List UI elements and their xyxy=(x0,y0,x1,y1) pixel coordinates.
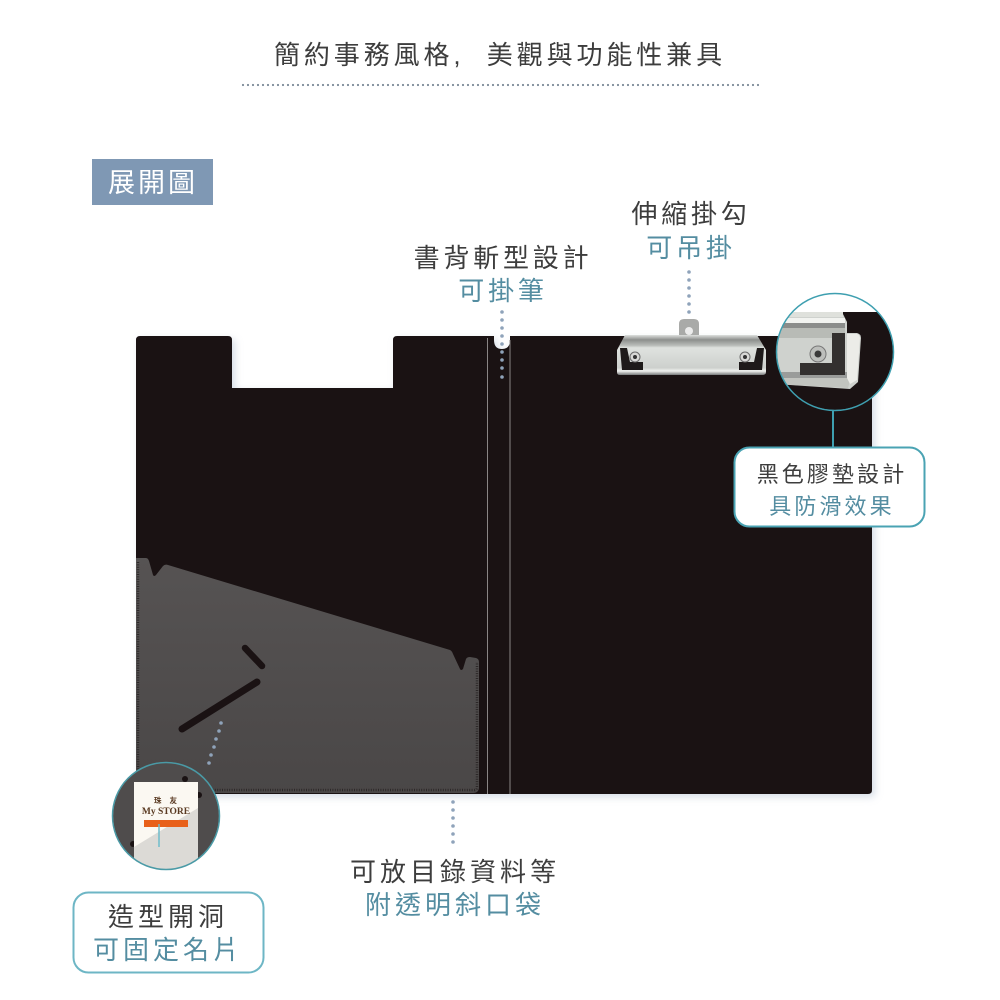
connector xyxy=(832,410,834,447)
black pad xyxy=(800,333,845,375)
label: 伸縮掛勾 xyxy=(631,199,751,263)
label: 可放目錄資料等: 附透明斜口袋 xyxy=(365,890,545,920)
clip plate xyxy=(775,312,861,389)
label: 伸縮掛勾: 可吊掛 xyxy=(646,233,736,263)
callout box: 黑色膠墊設計: 具防滑效果 xyxy=(769,494,895,519)
callout circle: business card: My STORE xyxy=(142,807,190,817)
callout box: 黑色膠墊設計: 黑色膠墊設計 xyxy=(757,462,907,487)
label: 可放目錄資料等 xyxy=(350,857,560,920)
callout circle: rubber pad detail xyxy=(775,290,897,447)
label: 書背斬型設計: 可掛筆 xyxy=(458,276,548,306)
hook xyxy=(679,319,699,335)
dotted leader: spine notch xyxy=(500,310,504,379)
label: 伸縮掛勾: 伸縮掛勾 xyxy=(631,199,751,229)
business card slots xyxy=(182,648,262,729)
transparent pocket xyxy=(136,558,479,793)
clipboard board xyxy=(136,336,875,797)
callout circle: business card xyxy=(110,760,222,872)
tag: 展開圖 xyxy=(92,159,213,205)
callout box: 造型開洞 xyxy=(74,892,264,972)
dotted leader: hook xyxy=(687,270,691,314)
label: 可放目錄資料等: 可放目錄資料等 xyxy=(350,857,560,887)
clip with hook xyxy=(617,319,766,375)
label: 書背斬型設計 xyxy=(414,243,592,306)
tag: 展開圖: 展開圖 xyxy=(108,168,198,198)
dotted leader: pocket xyxy=(451,800,455,844)
callout box: 黑色膠墊設計 xyxy=(734,448,924,526)
card text: 珠 友 xyxy=(154,795,180,805)
title: 簡約事務風格, 美觀與功能性兼具 xyxy=(274,40,726,70)
callout box: 造型開洞: 造型開洞 xyxy=(108,902,228,932)
callout box: 造型開洞: 可固定名片 xyxy=(93,935,243,965)
spine lines xyxy=(488,338,510,794)
label: 書背斬型設計: 書背斬型設計 xyxy=(414,243,592,273)
dotted leader: slots xyxy=(207,721,223,765)
